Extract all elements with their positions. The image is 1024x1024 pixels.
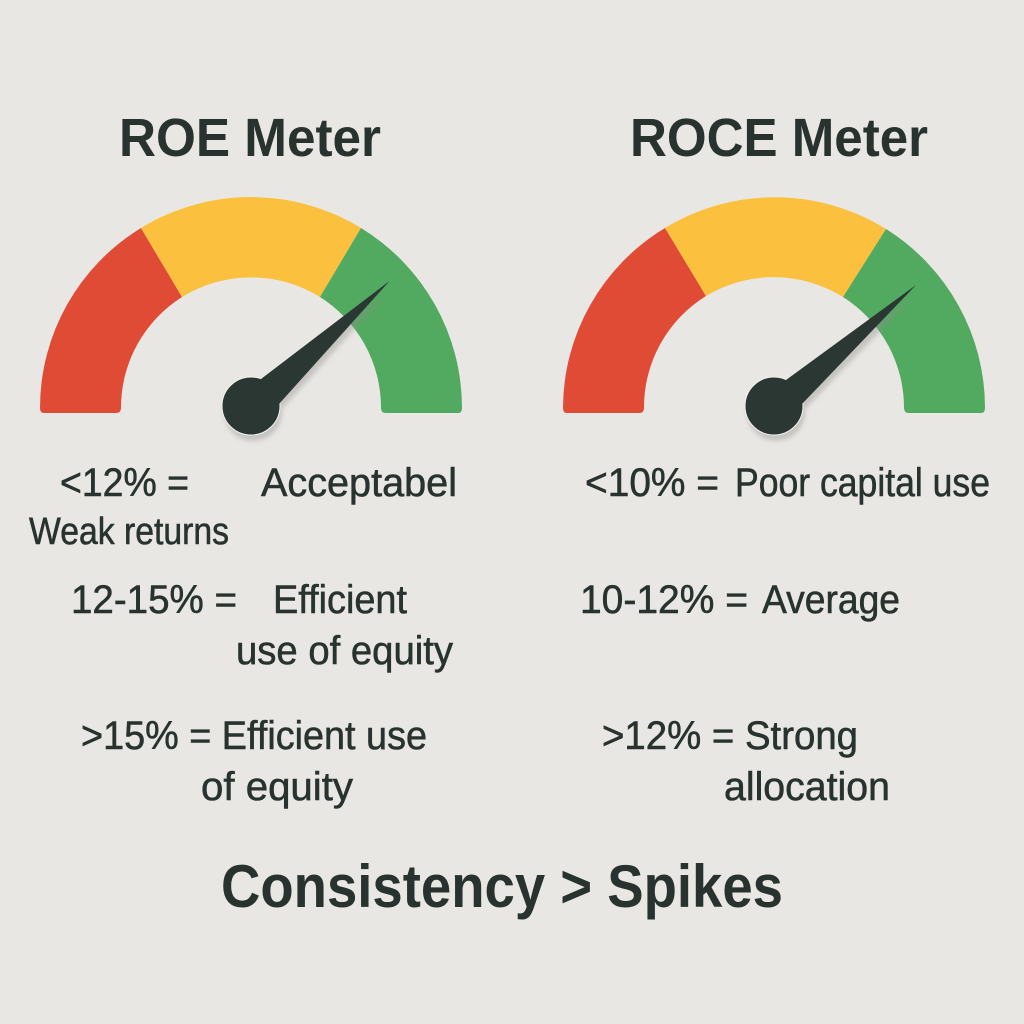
ROE text: over 15 percent — [81, 714, 427, 809]
gauge segment: green — [843, 229, 985, 413]
ROE text: 12-15 percent — [71, 578, 453, 673]
ROCE text: over 12 percent: >12% = Strong — [602, 714, 858, 758]
needle — [745, 285, 916, 435]
footer headline: Consistency > Spikes — [221, 853, 783, 920]
ROE text: under 12 percent: <12% = — [60, 461, 189, 505]
title: ROCE Meter: ROCE Meter — [630, 108, 928, 168]
gauge: ROCE — [563, 197, 985, 441]
ROCE text: over 12 percent: allocation — [724, 765, 890, 809]
ROE text: under 12 percent: Weak returns — [29, 511, 229, 553]
ROE text: 12-15 percent: Efficient — [273, 578, 407, 622]
ROCE text: 10-12 percent — [580, 578, 900, 622]
gauge segment: yellow — [141, 197, 361, 297]
ROE text: 12-15 percent: 12-15% = — [71, 578, 237, 622]
ROCE text: under 10 percent — [585, 461, 990, 505]
gauge segment: red — [40, 228, 182, 413]
needle — [222, 281, 390, 435]
gauge segment: red — [563, 228, 706, 413]
ROCE text: over 12 percent — [602, 714, 890, 809]
ROCE text: 10-12 percent: 10-12% = — [580, 578, 748, 622]
ROE text: over 15 percent: >15% = Efficient use — [81, 714, 427, 758]
gauge segment: green — [320, 228, 462, 413]
needle shadow — [224, 293, 387, 441]
ROE text: under 12 percent — [29, 461, 457, 553]
ROE text: under 12 percent: Acceptabel — [261, 461, 457, 505]
title: ROE Meter: ROE Meter — [119, 108, 381, 168]
ROCE text: under 10 percent: Poor capital use — [735, 461, 990, 505]
ROE text: 12-15 percent: use of equity — [236, 629, 453, 673]
needle shadow — [747, 297, 913, 441]
ROCE text: 10-12 percent: Average — [762, 578, 900, 622]
gauge segment: yellow — [665, 197, 886, 297]
ROCE text: under 10 percent: <10% = — [585, 461, 719, 505]
gauge: ROE — [40, 197, 462, 441]
ROE text: over 15 percent: of equity — [201, 765, 353, 809]
